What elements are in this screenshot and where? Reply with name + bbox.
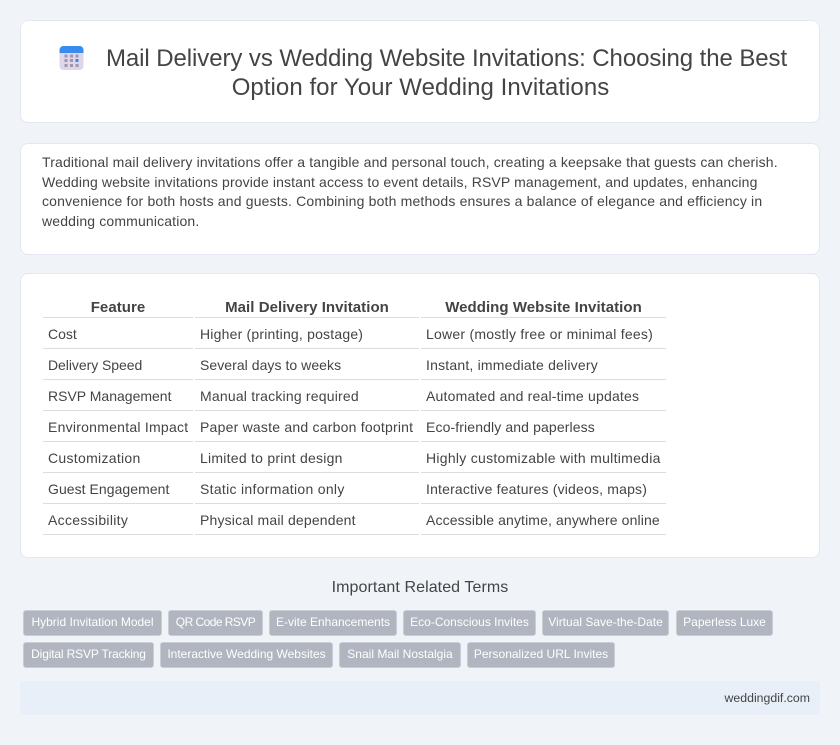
intro paragraph: wedding communication.	[42, 212, 199, 228]
title: Mail Delivery vs Wedding Website Invitations: Choosing the Best	[106, 45, 787, 72]
row: environmental impact	[48, 419, 595, 435]
panel: introduction	[20, 143, 820, 255]
row: accessibility: Accessible anytime, anywhere online	[426, 512, 660, 528]
row: RSVP management: Automated and real-time updates	[426, 388, 639, 404]
tag	[23, 610, 162, 636]
row: guest engagement: Guest Engagement	[48, 481, 169, 497]
related term tags	[23, 610, 773, 668]
row: cost: Cost	[48, 326, 77, 342]
intro paragraph: Traditional mail delivery invitations offer a tangible and personal touch, creating a keepsake that guests can cherish.	[42, 154, 778, 170]
intro paragraph	[42, 154, 778, 229]
table header row	[91, 299, 642, 316]
tag	[23, 642, 154, 668]
tag	[269, 610, 397, 636]
tag	[160, 642, 333, 668]
tag: Paperless Luxe	[683, 615, 766, 629]
icon: calendar	[60, 46, 84, 70]
tag: Interactive Wedding Websites	[167, 647, 326, 661]
tag: Personalized URL Invites	[474, 647, 608, 661]
tag: Eco-Conscious Invites	[410, 615, 529, 629]
intro paragraph: convenience for both hosts and guests. Combining both methods ensures a balance of elegance and efficiency in	[42, 193, 762, 209]
row: delivery speed	[48, 357, 598, 373]
row: delivery speed: Delivery Speed	[48, 357, 142, 373]
tag: Virtual Save-the-Date	[548, 615, 663, 629]
title	[106, 45, 787, 100]
row: delivery speed: Instant, immediate delivery	[426, 357, 598, 373]
row: customization: Limited to print design	[200, 450, 343, 466]
tag	[467, 642, 615, 668]
row: RSVP management	[48, 388, 639, 404]
tag	[339, 642, 461, 668]
heading: important related terms: Important Related Terms	[332, 579, 508, 596]
footer source text: weddingdif.com	[725, 691, 810, 705]
row: environmental impact: Environmental Impact	[48, 419, 188, 435]
tag: Hybrid Invitation Model	[31, 615, 154, 629]
tag: QR Code RSVP	[176, 615, 255, 629]
row: customization: Highly customizable with multimedia	[426, 450, 661, 466]
row: cost: Lower (mostly free or minimal fees)	[426, 326, 653, 342]
row: accessibility: Physical mail dependent	[200, 512, 356, 528]
row: accessibility	[48, 512, 660, 528]
table header row: Feature	[91, 299, 145, 316]
tag: E-vite Enhancements	[276, 615, 390, 629]
tag	[168, 610, 263, 636]
tag	[403, 610, 536, 636]
row: guest engagement: Static information only	[200, 481, 345, 497]
table header row: Mail Delivery Invitation	[225, 299, 389, 316]
tag: Digital RSVP Tracking	[31, 647, 146, 661]
panel: title header	[20, 20, 820, 123]
intro paragraph: Wedding website invitations provide instant access to event details, RSVP management, and updates, enhancing	[42, 174, 758, 190]
table header row: Wedding Website Invitation	[445, 299, 642, 316]
row: accessibility: Accessibility	[48, 512, 128, 528]
row: environmental impact: Paper waste and carbon footprint	[200, 419, 413, 435]
tag	[542, 610, 669, 636]
row: guest engagement	[48, 481, 647, 497]
panel: comparison table	[20, 273, 820, 558]
title: Option for Your Wedding Invitations	[232, 74, 609, 100]
row: RSVP management: RSVP Management	[48, 388, 171, 404]
tag: Snail Mail Nostalgia	[347, 647, 453, 661]
row: cost	[48, 326, 653, 342]
row: customization	[48, 450, 661, 466]
row: cost: Higher (printing, postage)	[200, 326, 363, 342]
row: guest engagement: Interactive features (videos, maps)	[426, 481, 647, 497]
footer bar	[20, 681, 820, 715]
row: customization: Customization	[48, 450, 141, 466]
tag	[676, 610, 773, 636]
row: environmental impact: Eco-friendly and paperless	[426, 419, 595, 435]
row: RSVP management: Manual tracking required	[200, 388, 359, 404]
comparison table	[43, 299, 666, 535]
row: delivery speed: Several days to weeks	[200, 357, 341, 373]
